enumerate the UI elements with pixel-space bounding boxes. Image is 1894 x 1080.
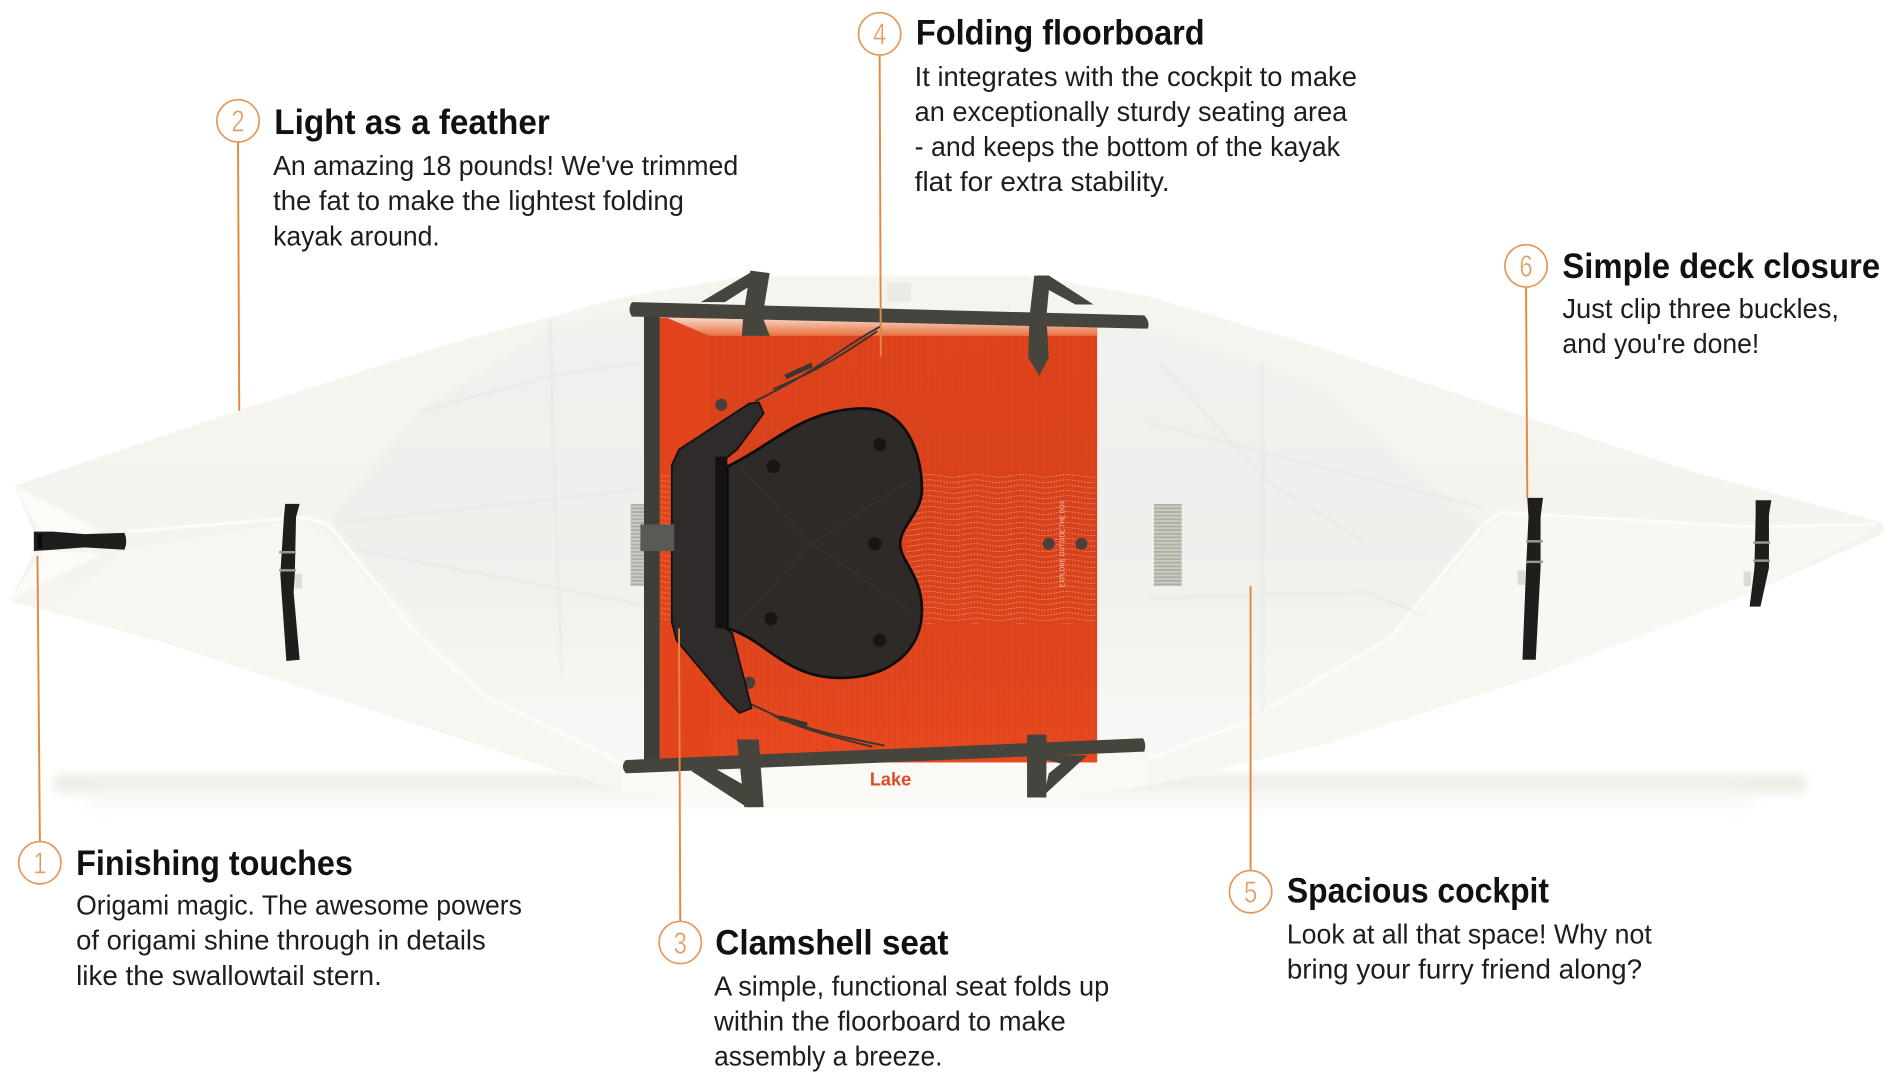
seat back shadow xyxy=(715,457,727,628)
callout 6: simple deck closure xyxy=(1505,245,1880,498)
open cockpit interior xyxy=(329,312,1481,764)
bottom gunwale bar xyxy=(623,738,1145,773)
callout 3: clamshell seat: assembly a breeze. xyxy=(714,1041,942,1072)
callout 1: finishing touches: Origami magic. The awesome powers xyxy=(76,890,522,921)
callout 6: simple deck closure: Just clip three buckles, xyxy=(1562,293,1839,324)
callout 2: light as a feather: 2 xyxy=(231,106,245,139)
top gunwale bar xyxy=(630,302,1149,329)
floor rivets xyxy=(715,399,1087,689)
callout 6: simple deck closure: 6 xyxy=(1519,251,1533,284)
cockpit fold creases xyxy=(344,320,1484,713)
callout 4: folding floorboard: flat for extra stability. xyxy=(915,166,1170,197)
red floorboard xyxy=(660,318,1097,762)
frame straps xyxy=(742,271,770,336)
callout 5: spacious cockpit: bring your furry friend along? xyxy=(1287,954,1642,985)
stern notch panels xyxy=(10,486,103,601)
Lake brand mark: Lake xyxy=(870,769,911,789)
hull xyxy=(10,276,1884,807)
ground shadow xyxy=(53,775,1808,805)
callout 2: light as a feather: An amazing 18 pounds! We've trimmed xyxy=(273,150,738,181)
callout 1: finishing touches xyxy=(19,556,522,991)
right grey grille xyxy=(1154,504,1182,586)
callout 2: light as a feather: Light as a feather xyxy=(274,102,550,142)
callout 4: folding floorboard: It integrates with the cockpit to make xyxy=(915,61,1357,92)
callout 1: finishing touches: of origami shine through in details xyxy=(76,925,486,956)
stern strap xyxy=(34,532,126,551)
seat snaps xyxy=(764,438,886,647)
callout 3: clamshell seat xyxy=(659,628,1109,1072)
callout 1: finishing touches: Finishing touches xyxy=(76,843,353,883)
callout 5: spacious cockpit: Spacious cockpit xyxy=(1287,871,1549,911)
pale top fold xyxy=(667,318,1097,336)
rear deck strap xyxy=(279,504,302,661)
callout 4: folding floorboard: 4 xyxy=(873,19,886,52)
callout 4: folding floorboard xyxy=(858,13,1357,356)
dotted wave pattern xyxy=(906,474,1095,623)
callout 5: spacious cockpit xyxy=(1229,586,1652,985)
clamshell seat cushion xyxy=(727,408,922,678)
callout 4: folding floorboard: Folding floorboard xyxy=(916,13,1205,53)
label patch on deck xyxy=(887,283,911,302)
lower side panels xyxy=(48,520,622,791)
rear side rail xyxy=(644,317,660,766)
callout 2: light as a feather xyxy=(217,100,738,411)
bottom rail braces xyxy=(691,755,1087,807)
callout 3: clamshell seat: within the floorboard to make xyxy=(713,1006,1066,1037)
callout 3: clamshell seat: Clamshell seat xyxy=(715,923,949,963)
callout 5: spacious cockpit: 5 xyxy=(1244,877,1257,910)
left grey grille xyxy=(631,504,644,586)
floor slogan: EXPLORE OUTSIDE THE BOX xyxy=(1058,500,1067,587)
callout 5: spacious cockpit: Look at all that space! Why not xyxy=(1287,919,1652,950)
callout 4: folding floorboard: - and keeps the bottom of the kayak xyxy=(915,131,1340,162)
callout 6: simple deck closure: and you're done! xyxy=(1562,328,1759,359)
callout 1: finishing touches: 1 xyxy=(33,848,47,881)
callout 4: folding floorboard: an exceptionally sturdy seating area xyxy=(915,96,1348,127)
callout 3: clamshell seat: 3 xyxy=(674,927,687,960)
deck frame xyxy=(623,271,1149,807)
seat straps xyxy=(749,326,884,747)
callout 1: finishing touches: like the swallowtail stern. xyxy=(76,960,382,991)
kayak xyxy=(10,271,1884,807)
side crease highlights xyxy=(127,512,1875,764)
seat backrest xyxy=(672,402,764,713)
callout 3: clamshell seat: A simple, functional seat folds up xyxy=(714,971,1109,1002)
top rail braces xyxy=(701,272,1094,305)
callout 2: light as a feather: the fat to make the lightest folding xyxy=(273,185,684,216)
bow strap xyxy=(1744,500,1771,607)
callout 2: light as a feather: kayak around. xyxy=(273,220,440,251)
front deck strap xyxy=(1518,498,1543,660)
left dotted wave pattern xyxy=(660,474,677,623)
